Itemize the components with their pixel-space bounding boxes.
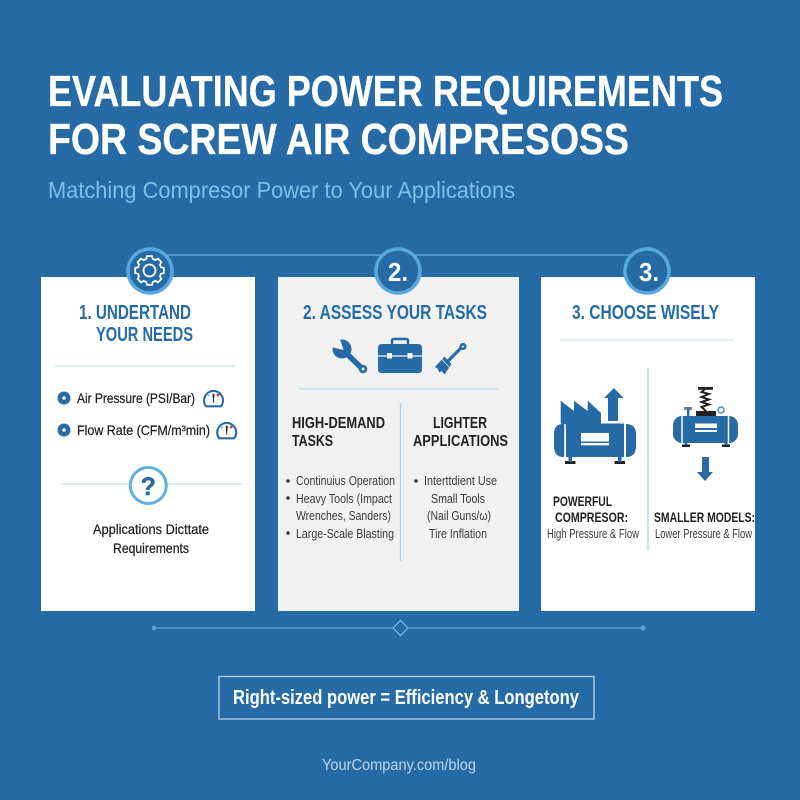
panel: step 3 choose wisely xyxy=(541,277,755,611)
list: lighter applications xyxy=(414,473,497,541)
callout: right-sized power: Right-sized power = Efficiency & Longetony xyxy=(233,687,580,709)
heading: high-demand tasks: HIGH-DEMAND xyxy=(292,415,385,432)
heading: step 3: 3. CHOOSE WISELY xyxy=(572,302,720,324)
connector line between steps xyxy=(150,254,648,256)
title xyxy=(48,67,723,164)
heading: high-demand tasks xyxy=(292,415,385,450)
heading: step 1: YOUR NEEDS xyxy=(96,324,193,346)
text: powerful compressor: COMPRESOR: xyxy=(555,509,628,525)
subtitle: Matching Compresor Power to Your Applications xyxy=(48,177,515,203)
list item: air pressure: Air Pressure (PSI/Bar) xyxy=(77,390,195,406)
icon: toolbox xyxy=(378,339,422,373)
icon: paintbrush xyxy=(435,343,466,374)
list item: flow rate: Flow Rate (CFM/m³min) xyxy=(77,422,210,438)
list: high-demand tasks: Continuius Operation xyxy=(296,473,395,488)
icon: pressure gauge xyxy=(204,391,223,406)
icon: smaller compressor with downward arrow xyxy=(673,387,738,481)
heading: step 1: 1. UNDERTAND xyxy=(79,302,191,324)
heading: step 2: 2. ASSESS YOUR TASKS xyxy=(303,302,487,324)
icon: gear xyxy=(135,256,164,285)
text: applications dictate requirements: Requirements xyxy=(113,540,189,556)
panel: step 2 assess your tasks xyxy=(278,277,519,611)
text: powerful compressor: POWERFUL xyxy=(553,493,612,509)
icon: question mark xyxy=(130,468,166,504)
text: powerful compressor: High Pressure & Flow xyxy=(547,526,639,541)
text: smaller models: Lower Pressure & Flow xyxy=(655,526,752,541)
footer url: YourCompany.com/blog xyxy=(322,757,476,774)
text: smaller models: SMALLER MODELS: xyxy=(654,509,755,525)
badge: step 2: 2. xyxy=(388,257,408,287)
badge: step 3: 3. xyxy=(639,257,659,287)
icon: wrench xyxy=(327,336,367,373)
list: high-demand tasks: Large-Scale Blasting xyxy=(296,526,394,541)
list: lighter applications: Interttdient Use xyxy=(424,473,497,488)
list: lighter applications: Small Tools xyxy=(431,491,485,506)
heading: step 1 xyxy=(79,302,193,346)
list: lighter applications: (Nail Guns/ω) xyxy=(427,508,491,523)
divider with diamond xyxy=(152,620,645,636)
list: lighter applications: Tire Inflation xyxy=(429,526,487,541)
list: high-demand tasks: Heavy Tools (Impact xyxy=(296,491,392,506)
text: powerful compressor xyxy=(547,493,639,541)
badge: step 1 gear xyxy=(128,249,172,293)
icon: flow gauge xyxy=(217,423,236,438)
panel: step 1 understand your needs xyxy=(41,277,255,611)
heading: lighter applications: LIGHTER xyxy=(433,415,487,432)
heading: high-demand tasks: TASKS xyxy=(292,433,333,450)
list: high-demand tasks xyxy=(286,473,395,541)
icon: question mark: ? xyxy=(141,473,156,501)
title: FOR SCREW AIR COMPRESOSS xyxy=(48,115,629,164)
badge: step 3 xyxy=(625,249,669,293)
callout: right-sized power xyxy=(219,676,594,719)
text: applications dictate requirements: Applications Dicttate xyxy=(93,521,209,537)
heading: lighter applications: APPLICATIONS xyxy=(413,433,508,450)
list: high-demand tasks: Wrenches, Sanders) xyxy=(296,508,391,523)
heading: lighter applications xyxy=(413,415,508,450)
badge: step 2 xyxy=(376,249,420,293)
icon: powerful compressor xyxy=(554,388,636,464)
text: applications dictate requirements xyxy=(93,521,209,556)
text: smaller models xyxy=(654,509,755,541)
